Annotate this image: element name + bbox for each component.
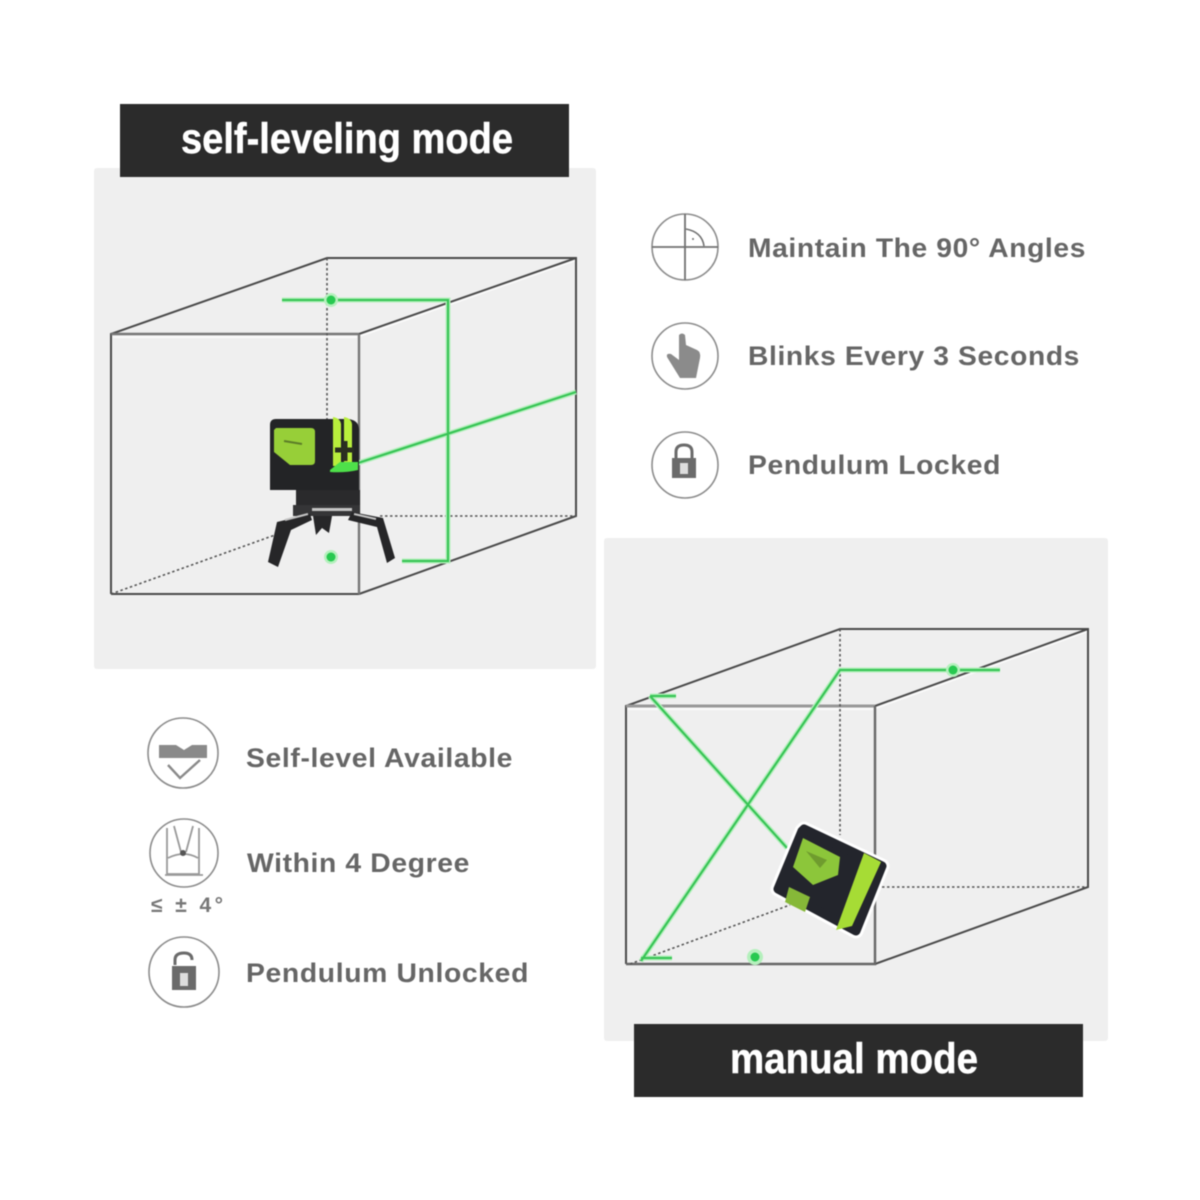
wireframe room: manual xyxy=(626,629,1088,964)
panel: manual mode xyxy=(604,538,1108,1041)
laser level on tripod xyxy=(268,417,395,567)
icon: pointing hand xyxy=(652,323,718,389)
feature: Self-level Available: Self-level Available xyxy=(246,743,513,773)
icon: crosshair angle xyxy=(652,214,718,280)
feature: Maintain The 90 degree Angles: Maintain The 90° Angles xyxy=(748,233,1086,263)
feature: Pendulum Locked: Pendulum Locked xyxy=(748,450,1001,480)
tilt tolerance label: ≤ ± 4° xyxy=(151,894,223,917)
feature: Within 4 Degree: Within 4 Degree xyxy=(247,848,470,878)
tilted laser level xyxy=(778,829,882,931)
heading: self-leveling mode: self-leveling mode xyxy=(181,115,513,163)
green laser lines: manual xyxy=(641,663,1000,965)
panel: self-leveling mode xyxy=(94,168,596,669)
feature: Pendulum Locked xyxy=(652,432,1001,498)
wireframe room: self-leveling xyxy=(111,258,576,594)
feature: Within 4 Degree xyxy=(150,819,470,917)
feature: Self-level Available xyxy=(148,718,513,788)
feature: Maintain The 90 degree Angles xyxy=(652,214,1086,280)
feature: Blinks Every 3 Seconds: Blinks Every 3 Seconds xyxy=(748,341,1080,371)
feature: Pendulum Unlocked xyxy=(149,937,529,1007)
heading: manual mode: manual mode xyxy=(730,1035,978,1083)
icon: closed padlock xyxy=(652,432,718,498)
green laser lines: self-leveling xyxy=(282,293,576,564)
heading: self-leveling mode xyxy=(120,104,569,177)
icon: open padlock xyxy=(149,937,219,1007)
heading: manual mode xyxy=(634,1024,1083,1097)
feature: Blinks Every 3 Seconds xyxy=(652,323,1080,389)
feature: Pendulum Unlocked: Pendulum Unlocked xyxy=(246,958,529,988)
icon: pendulum tilt range xyxy=(150,819,218,887)
icon: level with check mark xyxy=(148,718,218,788)
